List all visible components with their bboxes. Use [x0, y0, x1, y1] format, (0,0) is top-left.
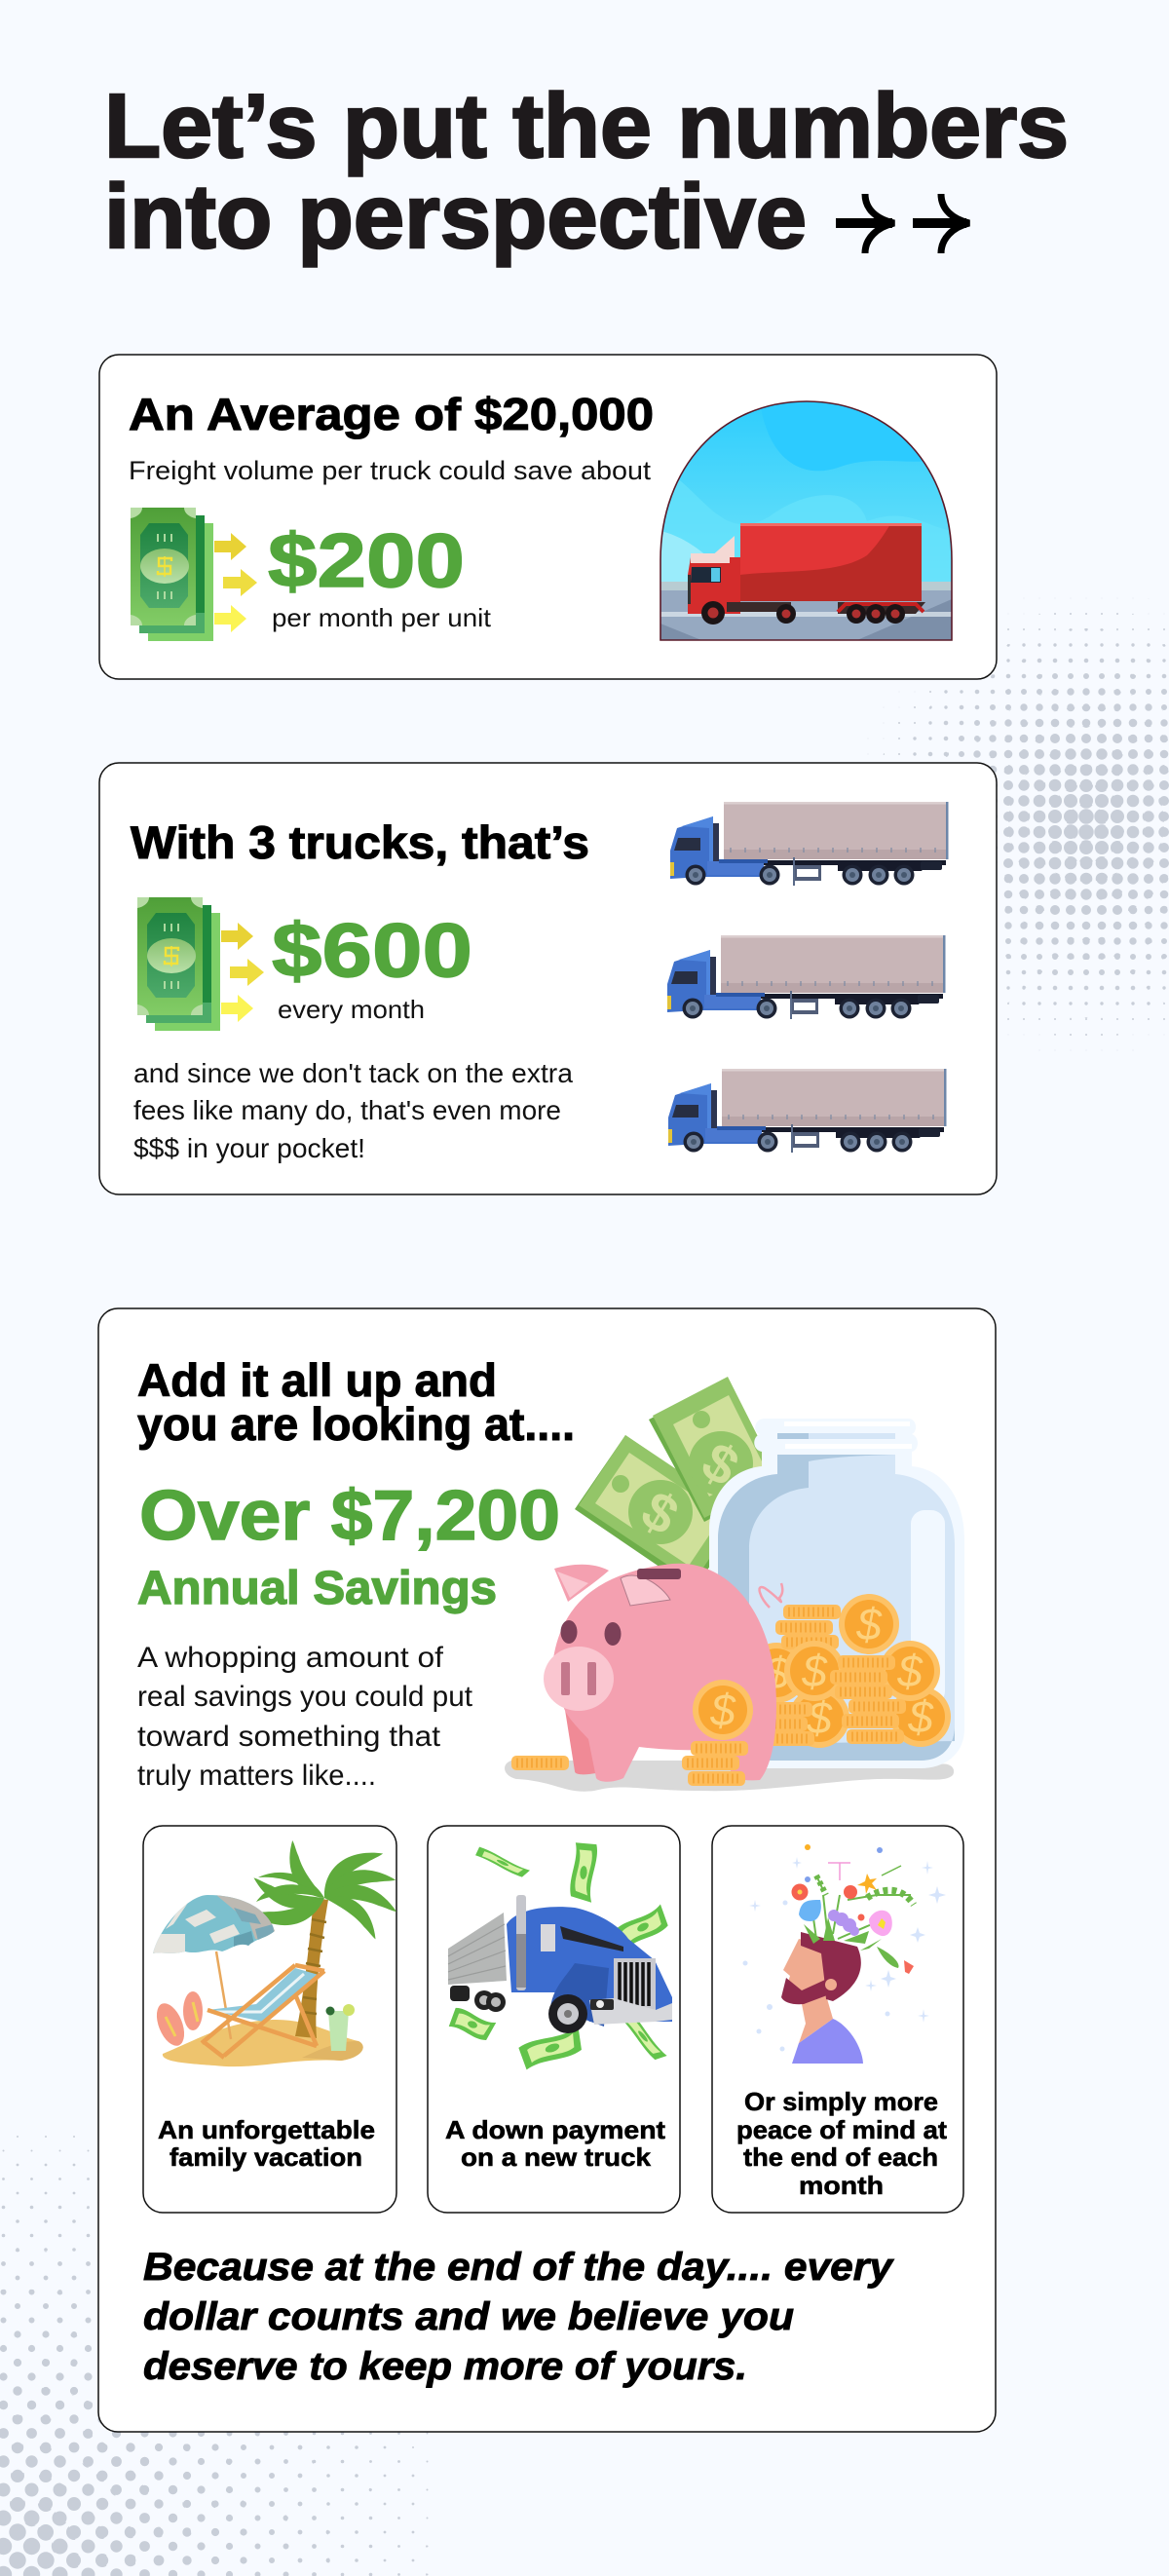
figure: over $7,200: Over $7,200 [139, 1477, 560, 1555]
title arrows [836, 194, 969, 253]
illustration: beach [146, 1837, 400, 2066]
panel: three trucks [99, 763, 997, 1194]
heading: add it all up [137, 1354, 575, 1450]
card: down payment [428, 1826, 680, 2213]
illustration: red truck under arch [660, 401, 952, 640]
halftone dots right [851, 589, 1169, 1057]
closing statement [143, 2246, 894, 2388]
closing statement: deserve to keep more of yours. [143, 2345, 747, 2388]
caption: family vacation [158, 2115, 375, 2172]
panel: annual savings [98, 1308, 996, 2432]
coins in front [511, 1680, 753, 1786]
subheading: annual savings: Annual Savings [137, 1563, 497, 1614]
halftone dots bottom left [0, 2136, 429, 2576]
text block: extra fees: fees like many do, that's even more [133, 1095, 561, 1125]
icon: blue truck 3 [668, 1069, 947, 1153]
jar [709, 1419, 964, 1768]
icon: blue truck 2 [667, 935, 945, 1019]
figure: $200: $200 [268, 517, 465, 603]
caption: family vacation: An unforgettable [158, 2115, 375, 2144]
label: per month per unit: per month per unit [272, 603, 492, 632]
panel: average savings [99, 355, 997, 679]
heading: add it all up: you are looking at.... [137, 1398, 575, 1450]
card: peace of mind [712, 1826, 963, 2213]
caption: peace of mind: peace of mind at [736, 2115, 947, 2144]
card: family vacation [143, 1826, 400, 2213]
text block: whopping amount: truly matters like.... [137, 1760, 376, 1792]
piggy bank [544, 1564, 776, 1782]
title [104, 75, 1069, 267]
closing statement: Because at the end of the day.... every [143, 2246, 894, 2289]
text block: whopping amount: toward something that [137, 1721, 441, 1753]
bills: $ [632, 1478, 689, 1547]
caption: peace of mind: the end of each [743, 2142, 938, 2172]
icon: blue truck 1 [670, 802, 949, 886]
caption: down payment: A down payment [445, 2115, 665, 2144]
illustration: truck with money [448, 1842, 672, 2071]
text block: whopping amount: real savings you could put [137, 1681, 473, 1713]
caption: down payment [445, 2115, 665, 2172]
subheading: freight volume: Freight volume per truck could save about [129, 456, 652, 485]
label: every month: every month [278, 995, 425, 1024]
coins in jar [746, 1594, 951, 1748]
figure: $600: $600 [272, 907, 472, 993]
closing statement: dollar counts and we believe you [143, 2295, 794, 2338]
caption: peace of mind [736, 2087, 947, 2200]
title: Let’s put the numbers [104, 75, 1069, 176]
heading: add it all up: Add it all up and [137, 1354, 497, 1406]
caption: family vacation: family vacation [170, 2142, 362, 2172]
illustration: man with flowers [742, 1844, 946, 2064]
text block: whopping amount [137, 1642, 473, 1792]
pig tail [760, 1583, 782, 1608]
bills [575, 1377, 779, 1590]
icon: money with arrows [137, 897, 264, 1031]
bills: $ [693, 1429, 749, 1498]
heading: with 3 trucks: With 3 trucks, that’s [131, 816, 589, 868]
title: into perspective [104, 166, 807, 267]
text block: whopping amount: A whopping amount of [137, 1642, 444, 1674]
text block: extra fees: and since we don't tack on the extra [133, 1058, 573, 1088]
illustration: piggy bank and jar [505, 1377, 964, 1792]
caption: peace of mind: month [799, 2171, 884, 2200]
text block: extra fees [133, 1058, 573, 1163]
icon: money with arrows [131, 508, 257, 641]
caption: down payment: on a new truck [461, 2142, 652, 2172]
heading: average: An Average of $20,000 [129, 389, 654, 439]
caption: peace of mind: Or simply more [744, 2087, 938, 2116]
text block: extra fees: $$$ in your pocket! [133, 1133, 365, 1163]
